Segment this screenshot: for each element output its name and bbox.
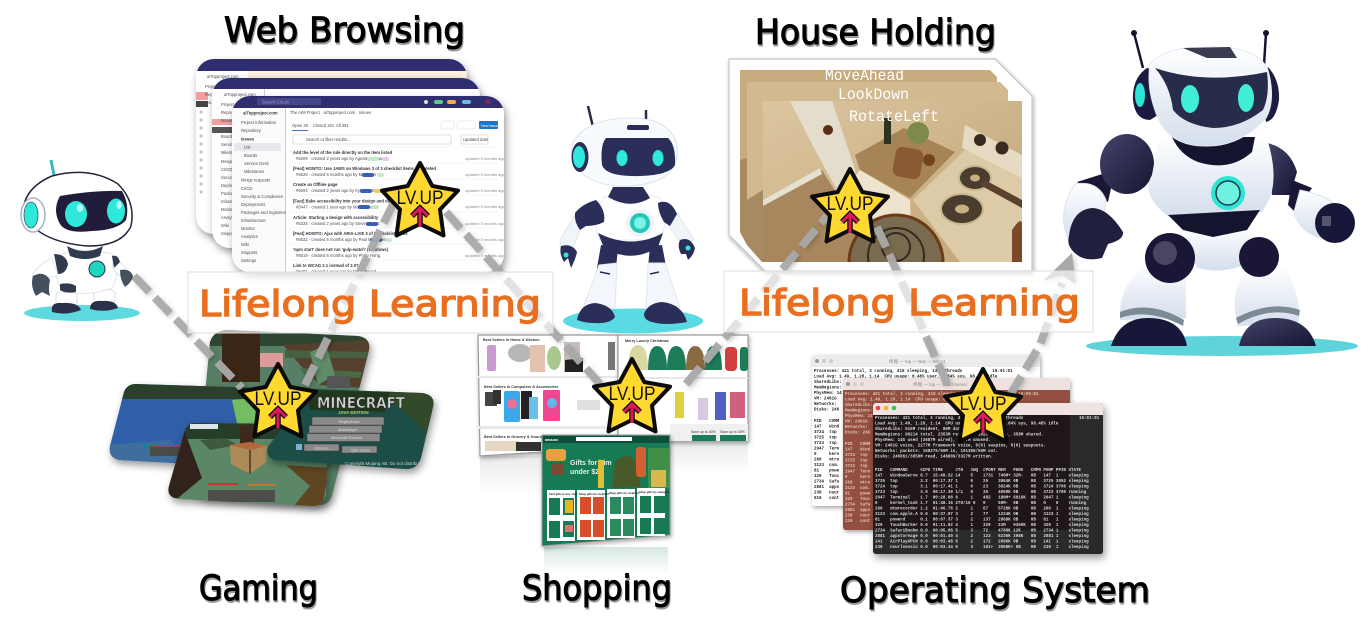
back terminal: 260 mtre xyxy=(814,458,840,462)
back browser window: aiTopproject.com xyxy=(207,74,239,79)
sidebar: aiTopproject.com xyxy=(243,110,278,116)
right product page: Merry Luxury Christmas xyxy=(625,339,669,343)
torso xyxy=(596,193,665,240)
back terminal: VM: 2461G xyxy=(814,398,837,402)
sidebar: Issues xyxy=(241,136,255,142)
back terminal: SharedLibs: xyxy=(814,380,842,385)
issues list: #5334 · created 2 years ago by Steve Barrett xyxy=(296,221,380,226)
action labels over frames xyxy=(826,70,938,121)
left product page: Best Sellers in Computers & Accessories xyxy=(484,385,558,389)
middle terminal: 1947 Term xyxy=(845,470,871,474)
back browser window: Repository xyxy=(205,92,226,97)
back terminal: 2734 Safa xyxy=(814,480,840,484)
front terminal xyxy=(873,403,1103,554)
icon: level up star on web browsing xyxy=(382,163,458,235)
front terminal: Disks: 246661/3850M read, 146809/3327M written. xyxy=(875,454,993,460)
middle terminal: 81 powe xyxy=(845,492,871,496)
back terminal: Processes: 421 total, 3 running, 418 sleeping, 1303 threads 16:01:01 xyxy=(814,369,1013,374)
sidebar: Deployments xyxy=(241,202,265,207)
issues list: updated 5 months ago xyxy=(465,221,506,226)
icon: level up star on shopping xyxy=(594,359,670,431)
action label: LookDown: LookDown xyxy=(838,86,909,104)
back terminal: 0 kern xyxy=(814,452,840,457)
back terminal: 2881 apps xyxy=(814,486,840,490)
front terminal: VM: 2461G vsize, 2277M framework vsize, 0(0) swapins, 0(0) swapouts. xyxy=(875,444,1046,448)
middle terminal: Disks: 246 xyxy=(845,430,871,436)
middle browser window: Milestones xyxy=(221,150,241,155)
front green gift page: Shop gifts by category xyxy=(639,490,670,494)
icon: level up star on web browsing: LV.UP xyxy=(396,188,444,209)
middle terminal: Networks: xyxy=(845,425,868,430)
front green gift page xyxy=(542,435,670,546)
antennas xyxy=(1131,30,1269,68)
issues list: updated 5 months ago xyxy=(465,237,506,242)
middle terminal: VM: 2461G xyxy=(845,420,868,424)
middle frame xyxy=(747,82,1008,262)
sidebar: Settings xyxy=(241,258,256,263)
back terminal: PID COMM xyxy=(814,420,840,424)
middle terminal: 110 cont xyxy=(845,520,871,524)
MINECRAFT logo text: MINECRAFT xyxy=(317,394,406,412)
sidebar: Project Information xyxy=(241,120,277,125)
issues list: #5447 · created 1 year ago by Matt Obee xyxy=(296,204,373,210)
left arm xyxy=(32,258,58,286)
issues list: #5209 · created 2 years ago by Agustina Chao xyxy=(296,156,383,161)
counter xyxy=(855,128,955,198)
middle terminal: 终端 — top — Sand Server xyxy=(913,381,968,388)
back terminal: 3725 top xyxy=(814,436,837,440)
issues list: updated 5 months ago xyxy=(465,172,506,177)
head xyxy=(1149,47,1272,146)
issues list: Link to WCAG 2.1 instead of 2.0? xyxy=(293,263,359,268)
middle terminal xyxy=(843,378,1070,530)
middle terminal: 238 nsur xyxy=(845,514,871,518)
middle terminal: Processes: 421 total, 3 running, 418 sleeping, 1303 threads 16:05:01 xyxy=(845,392,1039,397)
issues list: [Feat] HOWTO: Ajax with ARIA-LIVE 3 of 5 checklist items xyxy=(293,231,408,236)
hotbar xyxy=(208,490,275,502)
stove xyxy=(913,150,1022,262)
middle terminal: 3725 top xyxy=(845,460,868,464)
panel: house holding screenshots xyxy=(726,58,1036,275)
middle terminal: 147 Wind xyxy=(845,448,871,452)
Minecraft title menu screen: JAVA EDITION xyxy=(338,410,369,415)
Minecraft title menu screen: Multiplayer xyxy=(338,427,358,432)
left product page: Best Sellers in Home & Kitchen xyxy=(483,338,540,342)
back terminal xyxy=(812,355,1040,506)
front terminal: 3724 top 3.1 00:17.41 1 0 23 3824K 0B 0B 3724 3706 sleeping xyxy=(875,484,1089,490)
Minecraft title menu screen: Quit Game xyxy=(351,448,371,452)
Minecraft crafting table screen xyxy=(165,423,335,508)
sidebar: Monitor xyxy=(241,226,256,231)
front terminal: 16:01:01 xyxy=(1079,417,1100,421)
front terminal: PhysMem: 14G used (2687M wired), 1867M unused. xyxy=(875,438,991,443)
issues list: Create an Offline page xyxy=(293,182,338,187)
issues list: #5528 · created 6 months ago by Meuleren xyxy=(296,172,377,177)
bottle, lettuce and bread xyxy=(884,118,891,144)
middle terminal: 0 kern xyxy=(845,475,871,480)
Minecraft title menu screen: Options... xyxy=(314,446,331,450)
back terminal: 终端 — top — Bas — 80x24 xyxy=(889,358,946,365)
middle browser window: CI/CD xyxy=(221,167,232,172)
right product page xyxy=(618,335,748,441)
label text: Lifelong Learning xyxy=(199,284,541,325)
issues list: #5519 · created 6 months ago by Philip Hong xyxy=(296,253,381,258)
middle browser window: Service Desk xyxy=(221,142,247,147)
torso xyxy=(1148,136,1274,216)
sidebar xyxy=(232,108,286,272)
back terminal: Networks: xyxy=(814,402,837,407)
back terminal: 510 cont xyxy=(814,497,840,501)
icon: small robot xyxy=(21,160,140,321)
middle browser window: aiTopproject.com xyxy=(224,92,256,97)
issues list: #5094 · created 2 years ago by Kyle Boyle xyxy=(296,188,376,193)
issues list: Updated date xyxy=(463,137,489,142)
issues list: Search or filter results... xyxy=(306,137,350,142)
Minecraft title menu screen: Copyright Mojang AB. Do not distribute! xyxy=(345,461,424,466)
middle terminal: 268 mtre xyxy=(845,482,871,486)
Minecraft forest screen xyxy=(190,330,375,510)
sidebar: Boards xyxy=(244,153,257,158)
middle terminal: 329 Touc xyxy=(845,498,871,502)
sidebar: Snippets xyxy=(241,250,257,255)
front terminal: 141 AirPlayXPCH 0.0 00:03.48 6 2 172 2696K 0B 0B 141 1 sleeping xyxy=(875,540,1089,544)
reflection below product pages xyxy=(480,441,748,573)
back terminal: 81 powe xyxy=(814,470,840,474)
front green gift page: Shop gifts by recipient xyxy=(609,491,639,495)
sidebar: Packages and registries xyxy=(241,210,286,215)
issues list: [Feat] Bake accessibility into your design and development process xyxy=(293,198,429,204)
icon: level up star on operating system: LV.UP xyxy=(960,394,1006,415)
ears xyxy=(1133,68,1158,120)
sidebar: CI/CD xyxy=(241,186,252,191)
middle frame floor xyxy=(747,190,763,262)
back terminal: MemRegions: xyxy=(814,386,842,390)
right arm xyxy=(1267,143,1297,195)
issues list: Article: Starting a design with accessibility xyxy=(293,215,379,220)
panel: gaming screenshots xyxy=(105,330,437,510)
icon: level up star on house holding: LV.UP xyxy=(826,194,874,215)
front kitchen frame xyxy=(763,101,1022,262)
front terminal: 3725 top 3.2 00:17.37 1 0 25 3864K 0B 0B 3725 3052 sleeping xyxy=(875,479,1089,484)
issues list: Open 40 xyxy=(292,123,309,128)
issues list: The AIM Project · aiTopproject.com · Issues xyxy=(290,110,371,115)
panel: lifelong learning label right xyxy=(724,271,1093,332)
front terminal: Processes: 421 total, 2 running, 419 sleeping, 1303 threads xyxy=(875,416,1024,421)
back terminal: Load Avg: 1.49, 1.20, 1.14 CPU usage: 0.48% user, 0.84% sys, 98.67% idle xyxy=(814,374,998,380)
sidebar: Repository xyxy=(241,128,262,133)
sidebar: List xyxy=(244,144,251,150)
icon: level up star on gaming xyxy=(240,364,316,436)
back terminal: 3724 top xyxy=(814,431,837,435)
issues list: Closed 331 xyxy=(313,123,335,128)
middle terminal: 2881 apps xyxy=(845,509,871,513)
back browser window: Issues xyxy=(205,100,217,105)
front green gift page: under $25 xyxy=(570,469,603,476)
back terminal: 3723 top xyxy=(814,442,837,446)
front terminal: 238 nsurlsessio 0.0 00:03.44 6 3 181+ 3008K+ 0B 0B 238 1 sleeping xyxy=(875,545,1089,550)
door xyxy=(790,101,856,192)
middle terminal: PhysMem: 14 xyxy=(845,414,873,419)
panel: lifelong learning label left xyxy=(188,272,553,333)
sidebar: Milestones xyxy=(244,169,264,174)
issues list: updated 5 months ago xyxy=(465,204,506,209)
left arm xyxy=(1077,170,1115,202)
middle browser window: Boards xyxy=(221,134,234,139)
icon: large robot xyxy=(1064,30,1358,356)
icon: level up star on gaming: LV.UP xyxy=(254,389,302,410)
icon: level up star on operating system xyxy=(945,369,1021,441)
middle terminal: 3723 top xyxy=(845,465,868,469)
middle terminal: 3123 com. xyxy=(845,487,870,491)
back terminal: 329 Touc xyxy=(814,475,840,479)
right product page: Save up to 40% xyxy=(691,430,716,434)
title: House Holding: House Holding xyxy=(755,13,996,53)
back terminal: 3123 com. xyxy=(814,464,839,468)
head xyxy=(572,118,677,186)
sidebar: Merge requests xyxy=(241,178,270,182)
middle browser window: Deployments xyxy=(221,183,245,188)
browser header bar xyxy=(232,96,504,108)
middle browser window: Project Information xyxy=(221,102,257,107)
middle terminal: PID COMM xyxy=(845,443,871,447)
front terminal: Load Avg: 1.49, 1.20, 1.14 CPU usage: 0.48% user, 0.84% sys, 98.48% idle xyxy=(875,422,1059,426)
middle browser window: Security xyxy=(221,175,237,180)
middle browser window: Monitor xyxy=(221,207,236,212)
middle terminal: Load Avg: 1.49, 1.20, 1.14 CPU usage: 0.48% user xyxy=(845,398,969,402)
middle terminal: 3724 top xyxy=(845,454,868,458)
issues list: #5491 · created 1 year ago by Dylan Beard xyxy=(296,269,377,274)
crafting table xyxy=(230,442,267,474)
middle terminal: MemRegions: xyxy=(845,408,873,414)
front terminal: 81 powerd 0.1 00:07.37 3 2 137 2868K 0B 0B 81 1 sleeping xyxy=(875,518,1089,522)
shoulders xyxy=(575,200,604,230)
Minecraft title menu screen xyxy=(262,388,437,473)
issues list: #5532 · created 5 months ago by Paul McFaelen xyxy=(296,237,387,242)
icon: level up star on house holding xyxy=(812,169,888,241)
back browser window: Project Information xyxy=(205,84,241,89)
action label: RotateLeft: RotateLeft xyxy=(849,108,939,126)
back terminal: 2947 Term xyxy=(814,448,840,452)
sidebar: Service Desk xyxy=(244,161,270,166)
front green gift page: Find gifts in any style xyxy=(549,492,578,496)
icon: level up star on shopping: LV.UP xyxy=(608,384,656,405)
legs and feet xyxy=(56,292,77,306)
middle terminal: 2734 Safa xyxy=(845,502,871,508)
middle browser window: Repository xyxy=(221,110,242,115)
front green gift page: Shop gifts by recipient xyxy=(579,492,609,496)
issues list: 'npm start' does not run 'gulp-watch' (Windows) xyxy=(293,247,389,252)
action label: MoveAhead: MoveAhead xyxy=(825,67,904,85)
middle browser window: Issues xyxy=(221,118,233,123)
middle browser window: Snippets xyxy=(221,231,237,236)
label text: Lifelong Learning xyxy=(739,283,1080,324)
front browser window xyxy=(232,96,506,274)
browser header bar: Search GitLab xyxy=(262,100,289,104)
back terminal: 238 nsur xyxy=(814,492,840,496)
issues list: [Feat] HOWTO: Use JAWS on Windows 3 of 3 checklist items completed xyxy=(293,166,436,171)
front terminal: 329 TouchBarSer 0.0 01:11.82 4 1 329 23M 9300K 0B 329 1 sleeping xyxy=(875,523,1089,528)
middle browser window: Analytics xyxy=(221,215,238,220)
issues list: All 391 xyxy=(336,123,349,128)
icon: medium robot xyxy=(560,106,703,334)
sidebar: Wiki xyxy=(241,242,249,247)
back terminal: Disks: 246 xyxy=(814,408,840,412)
title: Gaming: Gaming xyxy=(199,569,318,609)
back terminal: 147 Wind xyxy=(814,424,840,430)
front terminal: PID COMMAND %CPU TIME #TH #WQ #PORT MEM PURG CMPR PGRP PPID STATE xyxy=(875,469,1082,473)
panel: operating system terminals xyxy=(812,355,1103,554)
front terminal: 147 WindowServe 6.7 15:40.52 14 5 1731 746M+ 32M- 0B 147 1 sleeping xyxy=(875,474,1089,478)
sidebar: Infrastructure xyxy=(241,218,266,223)
Minecraft lake screen xyxy=(105,384,275,469)
front terminal: 2881 appstoreage 0.0 00:01.49 4 2 123 6236K 208K 0B 2881 1 sleeping xyxy=(875,534,1089,539)
sidebar: Security & Compliance xyxy=(241,194,284,199)
middle browser window: Merge requests xyxy=(221,159,250,164)
Minecraft title menu screen: Singleplayer xyxy=(338,419,361,424)
issues list: Add the level of the rule directly on the item listed xyxy=(293,150,393,155)
body xyxy=(56,250,117,294)
front terminal: 0 kernel_task 1.7 01:48.16 270/16 0 0 59M- 0B 0B 0 0 running xyxy=(875,501,1087,506)
Minecraft title menu screen: Minecraft Realms xyxy=(331,435,362,440)
issues list: New issue xyxy=(481,124,499,128)
issues list xyxy=(290,110,506,274)
front terminal: 2734 SafariBookm 0.0 00:05.08 5 3 72 4788K 12K 0B 2734 1 sleeping xyxy=(875,528,1089,534)
front terminal: 3723 top 3.0 00:17.39 1/1 0 35 4008K 0B 0B 3723 3700 running xyxy=(875,490,1087,495)
front green gift page: amazon xyxy=(545,438,558,442)
back browser window xyxy=(196,59,467,234)
panel: web browsing screenshots xyxy=(196,59,506,274)
issues list: updated 5 months ago xyxy=(465,156,506,161)
middle browser window: Wiki xyxy=(221,223,229,228)
front terminal: SharedLibs: 515M resident, 86M data, 24M linkedit. xyxy=(875,427,1001,432)
pelvis and hips xyxy=(1173,227,1250,270)
back frame floor xyxy=(740,158,747,245)
white cut-corner frame xyxy=(729,59,1032,271)
gift columns xyxy=(547,488,665,541)
legs xyxy=(597,245,618,268)
panel: shopping screenshots xyxy=(478,335,748,573)
left product page xyxy=(478,335,618,456)
legs xyxy=(1120,263,1186,320)
front terminal: Networks: packets: 168275/60M in, 191369/50M out. xyxy=(875,449,998,454)
back terminal: PhysMem: 14 xyxy=(814,391,842,396)
sidebar: Analytics xyxy=(241,234,258,239)
middle browser window: Packages xyxy=(221,191,239,196)
middle browser window xyxy=(212,78,480,249)
right product page: Save up to 30% xyxy=(720,430,745,434)
arms xyxy=(560,212,581,248)
front terminal: 2947 Terminal 1.7 00:28.08 6 1 482 180M+ 6916K 0B 2947 1 sleeping xyxy=(875,496,1089,500)
middle terminal: SharedLibs: xyxy=(845,403,873,408)
head xyxy=(23,172,132,246)
title: Operating System: Operating System xyxy=(840,571,1150,611)
middle browser window: Infrastructure xyxy=(221,199,246,204)
front green gift page: Gifts for him xyxy=(570,460,612,467)
dashed learning path with arrow xyxy=(134,202,1076,395)
front terminal: 3123 com.apple.A 0.9 00:37.87 3 2 77 1224K 0B 0B 3123 1 sleeping xyxy=(875,512,1089,517)
issues list: updated 5 months ago xyxy=(465,253,506,258)
left product page: Best Sellers in Grocery & Gourmet Food xyxy=(484,435,557,439)
front terminal: MemRegions: 90214 total, 2353M resident, 102M private, 358M shared. xyxy=(875,432,1043,438)
title: Shopping: Shopping xyxy=(522,569,672,609)
title: Web Browsing: Web Browsing xyxy=(224,11,465,51)
front terminal: 260 mtmrecorder 1.2 01:46.76 2 1 67 5728K 0B 0B 260 1 sleeping xyxy=(875,506,1089,512)
right arm xyxy=(112,258,130,278)
round pan at bottom xyxy=(848,214,944,262)
back frame xyxy=(740,70,997,240)
issues list: updated 5 months ago xyxy=(465,188,506,193)
